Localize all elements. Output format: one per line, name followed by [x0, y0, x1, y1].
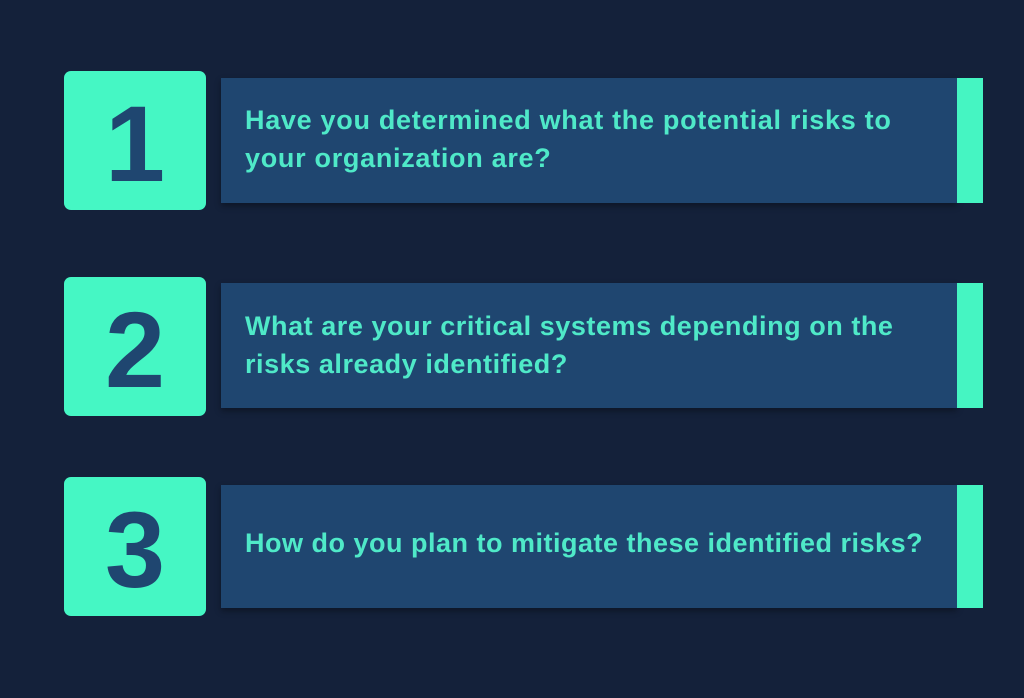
number box 3: 3 — [105, 489, 165, 610]
accent 2 — [957, 283, 983, 408]
question text 1 — [245, 105, 892, 173]
accent 1 — [957, 78, 983, 203]
number box 2 — [64, 277, 206, 416]
question text 2: What are your critical systems depending on the — [245, 311, 894, 341]
question text 2 — [245, 311, 894, 379]
number box 3 — [64, 477, 206, 616]
question text 1: Have you determined what the potential risks to — [245, 105, 892, 135]
row 2 — [64, 277, 983, 416]
question bar 3 — [221, 485, 957, 608]
row 1 — [64, 71, 983, 210]
row 3 — [64, 477, 983, 616]
question bar 2 — [221, 283, 957, 408]
question text 3: How do you plan to mitigate these identified risks? — [245, 528, 923, 558]
question text 1: your organization are? — [245, 143, 551, 173]
number box 1 — [64, 71, 206, 210]
number box 1: 1 — [105, 83, 165, 204]
question text 2: risks already identified? — [245, 349, 568, 379]
accent 3 — [957, 485, 983, 608]
number box 2: 2 — [105, 289, 165, 410]
question bar 1 — [221, 78, 957, 203]
